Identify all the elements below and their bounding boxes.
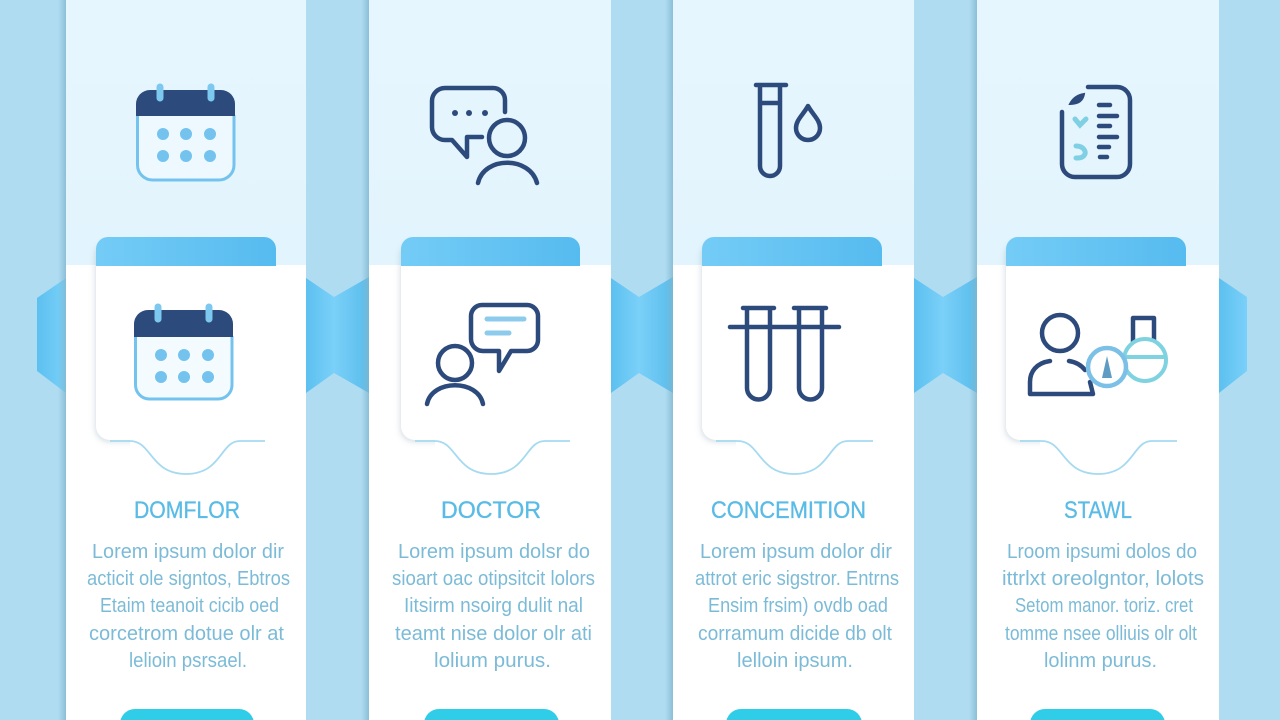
text block: lelioin psrsael. (129, 650, 247, 672)
button (1030, 709, 1165, 720)
text block: Iitsirm nsoirg dulit nal (404, 595, 583, 617)
button (424, 709, 559, 720)
text block: teamt nise dolor olr ati (395, 623, 592, 645)
inner card (96, 240, 196, 440)
heading: DOMFLOR (134, 497, 240, 524)
text block: ittrlxt oreolgntor, lolots (1002, 568, 1204, 590)
icon: person with flask (1030, 315, 1166, 394)
inner card (1006, 240, 1106, 440)
heading: CONCEMITION (711, 497, 866, 524)
text block: Lorem ipsum dolsr do (398, 541, 590, 563)
text block: Lroom ipsumi dolos do (1007, 541, 1197, 563)
text block: lelloin ipsum. (737, 650, 853, 672)
text block: sioart oac otipsitcit lolors (392, 568, 595, 590)
panel: column 4 (977, 0, 1219, 720)
heading: DOCTOR (441, 497, 541, 524)
text block (1002, 541, 1204, 672)
button (120, 709, 254, 720)
tab (401, 237, 580, 266)
text block: Setom manor. toriz. cret (1015, 595, 1193, 617)
text block: corcetrom dotue olr at (89, 623, 284, 645)
text block: Lorem ipsum dolor dir (92, 541, 284, 563)
text block: Ensim frsim) ovdb oad (708, 595, 888, 617)
text block: lolium purus. (434, 650, 551, 672)
icon: test tube and drop (756, 85, 820, 176)
tab (1006, 237, 1186, 266)
button (726, 709, 862, 720)
inner card (401, 240, 501, 440)
panel: column 1 (66, 0, 306, 720)
panel: column 2 (369, 0, 611, 720)
text block (392, 541, 595, 672)
text block: Etaim teanoit cicib oed (100, 595, 279, 617)
heading: STAWL (1064, 497, 1132, 524)
tab (96, 237, 276, 266)
icon: calendar bottom (134, 307, 233, 399)
text block: Lorem ipsum dolor dir (700, 541, 892, 563)
inner card (702, 240, 802, 440)
text block (87, 541, 290, 672)
panel: column 3 (673, 0, 914, 720)
icon: speech bubble with person top (432, 88, 537, 183)
icon: person with speech bubble bottom (427, 305, 538, 404)
text block: lolinm purus. (1044, 650, 1157, 672)
tab (702, 237, 882, 266)
text block: corramum dicide db olt (698, 623, 892, 645)
text block: acticit ole signtos, Ebtros (87, 568, 290, 590)
text block: tomme nsee olliuis olr olt (1005, 623, 1197, 645)
text block (695, 541, 899, 672)
icon: two test tubes (730, 308, 839, 400)
text block: attrot eric sigstror. Entrns (695, 568, 899, 590)
icon: calendar top (136, 87, 235, 180)
icon: document checklist (1062, 87, 1130, 177)
